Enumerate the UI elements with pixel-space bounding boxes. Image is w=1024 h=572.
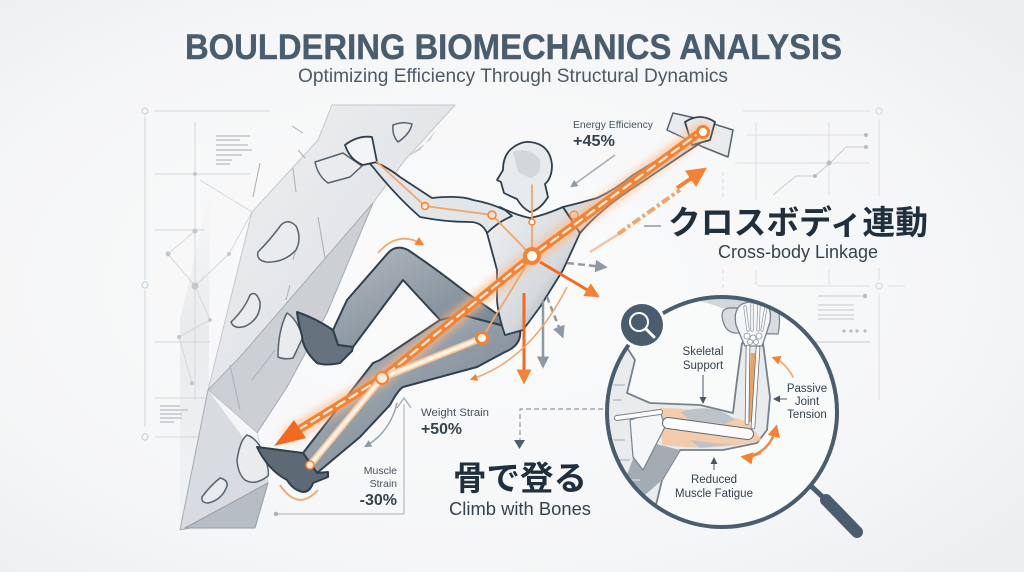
label: passive joint tension: Passive <box>787 383 827 395</box>
climber: head <box>497 142 552 212</box>
callout: muscle strain <box>360 465 397 509</box>
callout: energy efficiency <box>573 119 654 150</box>
label: passive joint tension <box>775 383 827 421</box>
title: BOULDERING BIOMECHANICS ANALYSIS <box>185 28 842 67</box>
heading: cross-body linkage: クロスボディ連動 <box>668 204 928 241</box>
callout: energy efficiency: +45% <box>573 133 615 150</box>
callout: weight strain: Weight Strain <box>421 407 489 419</box>
wall holds <box>202 113 733 503</box>
heading: climb with bones: 骨で登る <box>453 461 587 498</box>
callout: muscle strain: Muscle <box>364 465 397 477</box>
callout: muscle strain: Strain <box>370 478 397 490</box>
callout: weight strain: +50% <box>421 421 462 438</box>
callout: energy efficiency: Energy Efficiency <box>573 119 654 131</box>
label: passive joint tension: Tension <box>787 409 827 421</box>
climber: torso and arms <box>345 117 715 335</box>
label: reduced muscle fatigue: Reduced <box>691 474 737 486</box>
force arrows <box>274 155 702 516</box>
joint nodes <box>306 126 708 469</box>
kinetic chain: orange glow and bones <box>290 130 703 465</box>
label: passive joint tension: Joint <box>795 396 820 408</box>
joint motion arrows <box>744 358 793 457</box>
callout: muscle strain: -30% <box>360 492 397 509</box>
icon: magnifier handle <box>812 487 857 532</box>
icon: magnifying glass badge <box>618 301 666 349</box>
climber: legs <box>257 248 520 492</box>
heading: cross-body linkage <box>668 204 928 262</box>
climbing wall <box>180 105 455 530</box>
label: reduced muscle fatigue <box>675 459 753 500</box>
label: skeletal support <box>683 346 724 402</box>
heading: climb with bones: Climb with Bones <box>449 499 591 519</box>
label: skeletal support: Support <box>683 360 724 372</box>
label: reduced muscle fatigue: Muscle Fatigue <box>675 488 753 500</box>
heading: cross-body linkage: Cross-body Linkage <box>718 242 878 262</box>
label: skeletal support: Skeletal <box>683 346 723 358</box>
heading: climb with bones <box>449 461 591 519</box>
left technical schematic <box>142 108 270 530</box>
subtitle: Optimizing Efficiency Through Structural Dynamics <box>298 66 728 87</box>
arrow: large lower-left orange arrowhead <box>274 420 306 446</box>
right technical schematic <box>723 108 905 400</box>
panel: magnified arm detail <box>600 297 837 530</box>
callout: weight strain <box>421 407 489 438</box>
